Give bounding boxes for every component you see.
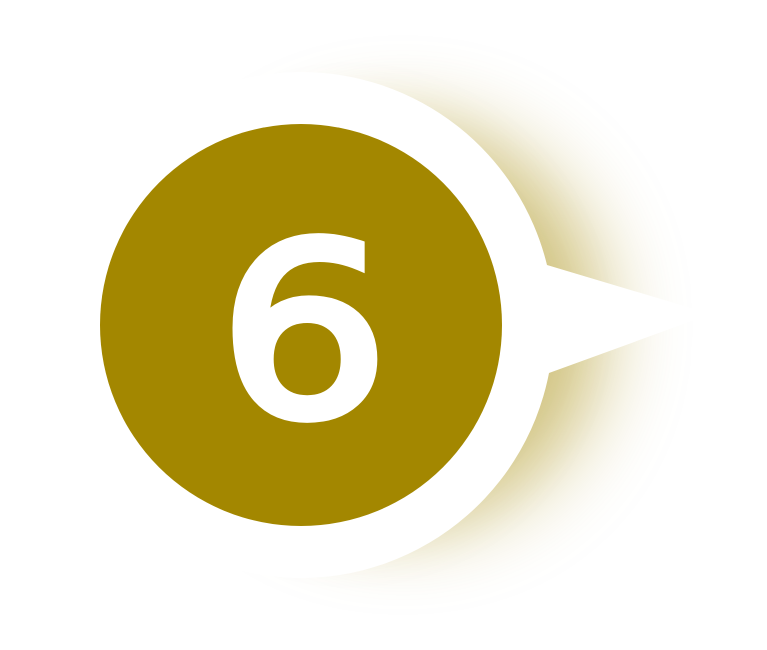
gold circle <box>100 124 502 526</box>
number 6: 6 <box>219 193 389 472</box>
white pin shape with pointer <box>48 72 711 578</box>
pin shadow <box>110 85 603 565</box>
